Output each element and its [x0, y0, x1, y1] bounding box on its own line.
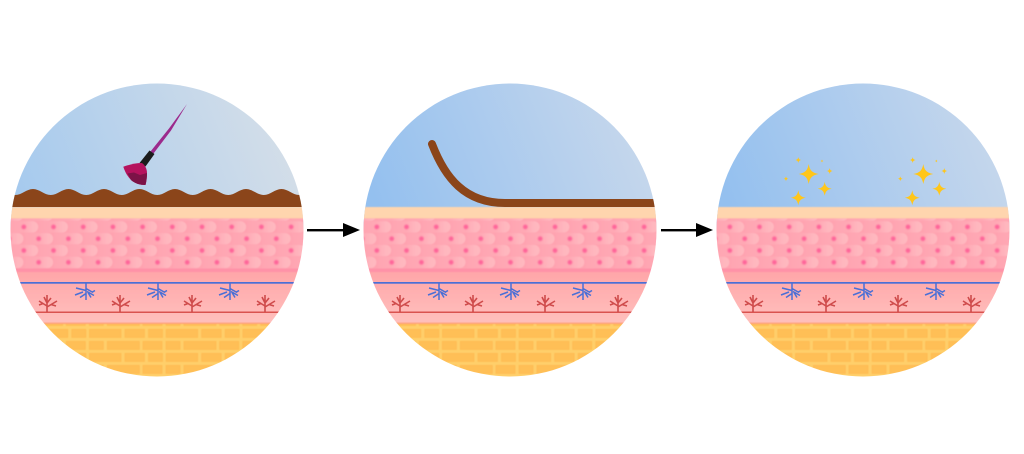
skin layers: [713, 207, 1013, 379]
arrow: step two to step three: [661, 223, 713, 237]
icon: right sparkles: [898, 157, 947, 205]
peeling brown strip: [432, 144, 660, 203]
sky background: [363, 83, 657, 230]
icon: left sparkles: [784, 157, 833, 205]
arrow: step one to step two: [307, 223, 360, 237]
sky background: [10, 83, 304, 230]
panel: product peeled away from skin: [360, 83, 660, 379]
panel: clean sparkling skin: [713, 83, 1013, 379]
sky background: [716, 83, 1010, 230]
skin layers: [7, 207, 307, 379]
icon: makeup brush: [123, 104, 187, 185]
skin layers: [360, 207, 660, 379]
panel: product being brushed onto skin: [7, 83, 307, 379]
bumpy brown product layer: [7, 189, 307, 207]
